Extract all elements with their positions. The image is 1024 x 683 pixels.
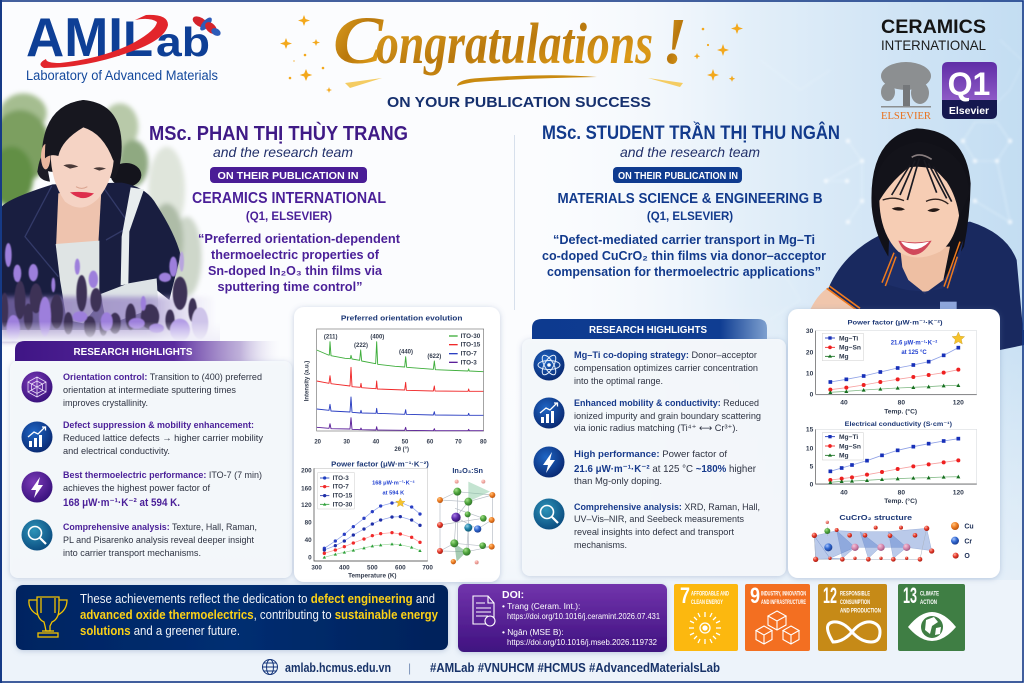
- icon: lightning: [534, 446, 564, 478]
- line chart: electrical conductivity: Mg−Sn: [839, 443, 861, 450]
- SDG tile 7: 7: [680, 583, 690, 608]
- icon: rising bars: [22, 422, 52, 452]
- SDG tile 9: 9: [750, 583, 760, 608]
- highlights header: [15, 341, 280, 361]
- logo wordmark: AMI: [26, 6, 123, 68]
- XRD chart: preferred orientation evolution: 80: [480, 439, 487, 445]
- hair: [871, 128, 971, 280]
- chart card: [788, 309, 1000, 578]
- icon: magnifier: [534, 498, 564, 530]
- line chart: power factor left: 600: [395, 565, 406, 572]
- title gold swooshes: [345, 75, 683, 88]
- trees behind the researcher: [0, 93, 202, 297]
- panel: charts right: [788, 309, 1000, 578]
- line chart: power factor left: 168 μW·m⁻¹·K⁻²: [372, 479, 415, 486]
- SDG tile 12: RESPONSIBLE: [840, 590, 870, 598]
- banner text: [80, 592, 438, 638]
- panel: research highlights right: [522, 319, 786, 576]
- XRD chart: preferred orientation evolution: Preferred orientation evolution: [341, 316, 462, 323]
- panel: achievements banner: [16, 585, 448, 650]
- line chart: power factor right: Mg: [839, 354, 849, 361]
- highlight text: high performance: High performance: Power factor of: [574, 449, 727, 459]
- line chart: electrical conductivity: Mg: [839, 453, 849, 460]
- highlights panel card: [522, 339, 786, 576]
- team line: and the research team: [620, 144, 760, 160]
- highlight text: defect suppression: Reduced lattice defects → higher carrier mobility: [63, 433, 263, 443]
- line chart: power factor left: [301, 461, 433, 580]
- title: Congratulations: ongratulations: [376, 11, 653, 76]
- logo red swoosh: [40, 15, 168, 68]
- banner text: solutions and a greener future.: [80, 624, 240, 638]
- Elsevier wordmark: ELSEVIER: [881, 111, 931, 122]
- XRD chart: preferred orientation evolution: 30: [343, 439, 351, 445]
- XRD chart: preferred orientation evolution: 2θ (°): [394, 447, 409, 453]
- lavender fade: [0, 322, 220, 342]
- highlights header: RESEARCH HIGHLIGHTS: [74, 346, 192, 358]
- icon: magnifier: [22, 520, 52, 550]
- author block: Phan Thi Thuy Trang: [149, 121, 408, 294]
- paper title quote: Sn-doped In₂O₃ thin films via: [208, 264, 383, 278]
- line chart: power factor right: Mg−Sn: [839, 345, 861, 352]
- neck and chest: [56, 185, 102, 247]
- highlight text: enhanced mobility: via ionic radius matching (Ti⁴⁺ ⟷ Cr³⁺).: [574, 423, 738, 433]
- line chart: power factor right: at 125 °C: [901, 350, 927, 356]
- SDG tile 9: [745, 583, 810, 651]
- navy polo shirt: [828, 222, 1024, 340]
- line chart: power factor right: 80: [898, 399, 905, 406]
- SDG tile 7: AFFORDABLE AND: [691, 590, 729, 598]
- highlight text: best thermoelectric performance: Best thermoelectric performance: ITO-7 (7 min): [63, 470, 262, 480]
- DOI text: DOI:: [502, 589, 524, 601]
- line chart: electrical conductivity: 15: [806, 427, 814, 434]
- XRD chart: preferred orientation evolution: (211): [324, 335, 337, 341]
- XRD chart: preferred orientation evolution: (440): [399, 350, 413, 356]
- icon: lightning: [22, 472, 52, 502]
- paper title quote: co-doped CuCrO₂ thin films via donor–acceptor: [542, 249, 826, 263]
- highlight text: comprehensive analysis: [574, 502, 760, 550]
- left edge border mask for photo: [0, 0, 2, 683]
- line chart: power factor right: 120: [953, 399, 964, 406]
- XRD chart: preferred orientation evolution: 20: [314, 439, 322, 445]
- banner text: advanced oxide thermoelectrics, contributing to sustainable energy: [80, 608, 438, 622]
- highlight text: comprehensive analysis: UV–Vis–NIR, and Seebeck measurements: [574, 514, 744, 524]
- chart card: [294, 307, 500, 582]
- journal: Ceramics International: [881, 17, 997, 122]
- line chart: power factor right: 21.6 μW·m⁻¹·K⁻²: [891, 340, 937, 347]
- SDG tile 9: INDUSTRY, INNOVATION: [761, 590, 806, 598]
- author block: Phan Thi Thuy Trang: (Q1, ELSEVIER): [246, 211, 332, 223]
- XRD chart: preferred orientation evolution: (622): [427, 354, 441, 360]
- line chart: power factor left: Power factor (μW·m⁻¹·K⁻²): [331, 461, 429, 468]
- highlight text: Mg-Ti co-doping: [574, 350, 758, 386]
- line chart: power factor left: 200: [301, 468, 312, 475]
- highlight text: best thermoelectric performance: achieves the highest power factor of: [63, 483, 210, 493]
- paper title quote: [198, 232, 401, 294]
- journal name: MATERIALS SCIENCE & ENGINEERING B: [558, 191, 822, 207]
- logo subtitle: Laboratory of Advanced Materials: [26, 68, 218, 83]
- paper title quote: “Preferred orientation-dependent: [198, 232, 401, 246]
- paper title quote: compensation for thermoelectric applications”: [547, 265, 821, 279]
- highlight text: orientation control: orientation at intermediate sputtering times: [63, 385, 236, 395]
- author name: MSc. PHAN THỊ THÙY TRANG: [149, 121, 408, 145]
- DOI text: • Ngân (MSE B):: [502, 627, 564, 637]
- arm and shoulder: [810, 287, 863, 310]
- decorative gold stars right: [694, 23, 743, 82]
- photo: researcher Tran Thi Thu Ngan: [810, 128, 1024, 340]
- crystal structure: CuCrO2: O: [964, 553, 970, 560]
- pill: ON THEIR PUBLICATION IN: [618, 171, 738, 182]
- journal name: CERAMICS INTERNATIONAL: [192, 190, 386, 207]
- line chart: electrical conductivity: Temp. (°C): [884, 497, 917, 505]
- XRD chart: preferred orientation evolution: Intensity (a.u.): [304, 361, 310, 401]
- highlight text: high performance: than Mg-only doping.: [574, 476, 662, 486]
- highlight text: defect suppression: Defect suppression & mobility enhancement:: [63, 420, 254, 430]
- SDG tile 13: [898, 583, 965, 651]
- highlight text: comprehensive analysis: into carrier transport mechanisms.: [63, 548, 201, 558]
- logo: AMI Lab: [26, 6, 222, 83]
- line chart: power factor left: 400: [339, 565, 350, 572]
- line chart: power factor left: 120: [301, 502, 312, 509]
- XRD chart: preferred orientation evolution: 40: [373, 439, 380, 445]
- hashtags: #AMLab #VNUHCM #HCMUS #AdvancedMaterialsLab: [430, 661, 720, 675]
- highlight text: defect suppression: [63, 420, 263, 456]
- icon: globe: [262, 660, 278, 674]
- line chart: electrical conductivity: 5: [810, 463, 814, 470]
- line chart: power factor left: Temperature (K): [348, 573, 397, 580]
- SDG tile 13: ACTION: [920, 599, 937, 606]
- author name: MSc. STUDENT TRẦN THỊ THU NGÂN: [542, 122, 840, 144]
- orange sleeve trim: [827, 286, 860, 310]
- face: [873, 142, 969, 257]
- line chart: electrical conductivity: 40: [840, 490, 848, 497]
- highlight text: best thermoelectric performance: 168 μW·m⁻¹·K⁻² at 594 K.: [63, 497, 180, 509]
- website: amlab.hcmus.edu.vn: [285, 661, 391, 675]
- paper title quote: sputtering time control”: [218, 280, 362, 294]
- hair: [37, 100, 141, 187]
- crystal structure: CuCrO2: Cr: [964, 538, 972, 545]
- line chart: electrical conductivity: 120: [953, 490, 964, 497]
- SDG tile 9: AND INFRASTRUCTURE: [761, 599, 806, 606]
- line chart: power factor right: 10: [806, 371, 814, 378]
- title: Congratulations: C: [333, 2, 384, 78]
- author block: Tran Thi Thu Ngan: (Q1, ELSEVIER): [647, 211, 733, 223]
- highlight text: comprehensive analysis: reveal insights into defect and transport: [574, 527, 734, 537]
- highlight text: Mg-Ti co-doping: into the optimal range.: [574, 376, 663, 386]
- SDG tile 7: CLEAN ENERGY: [691, 599, 724, 606]
- line chart: power factor left: ITO-3: [333, 475, 349, 482]
- icon: Elsevier tree: [881, 62, 931, 108]
- line chart: power factor left: 700: [422, 565, 433, 572]
- XRD chart: preferred orientation evolution: ITO-30: [461, 333, 481, 340]
- highlight text: orientation control: improves crystallinity.: [63, 398, 148, 408]
- crystal structure: CuCrO2: Cu: [964, 524, 974, 531]
- XRD chart: preferred orientation evolution: 50: [402, 439, 409, 445]
- journal: Ceramics International: INTERNATIONAL: [881, 37, 986, 53]
- line chart: power factor left: at 594 K: [382, 491, 405, 497]
- navy jacket: [2, 183, 181, 330]
- subtitle: ON YOUR PUBLICATION SUCCESS: [387, 94, 651, 111]
- panel: DOI: [458, 584, 667, 652]
- pill: ON THEIR PUBLICATION IN: [218, 170, 358, 182]
- footer: [262, 660, 720, 675]
- line chart: power factor right: 30: [806, 328, 814, 335]
- shirt logo: [940, 302, 957, 311]
- line chart: power factor left: ITO-7: [333, 484, 349, 491]
- XRD chart: preferred orientation evolution: ITO-3: [461, 359, 477, 366]
- SDG tile 12: CONSUMPTION: [840, 599, 870, 606]
- highlight text: defect suppression: and electrical conductivity.: [63, 446, 170, 456]
- crystal structure: CuCrO2: [812, 513, 974, 562]
- panel: charts left: [294, 307, 500, 582]
- highlight text: best thermoelectric performance: [63, 470, 262, 509]
- highlights panel card: [10, 361, 292, 578]
- XRD chart: preferred orientation evolution: (222): [354, 343, 368, 349]
- line chart: electrical conductivity: 0: [810, 481, 814, 488]
- highlight text: enhanced mobility: [574, 398, 761, 433]
- SDG tile 13: 13: [903, 583, 917, 608]
- DOI text: [502, 589, 660, 647]
- paper title quote: [542, 233, 826, 279]
- apron bib: [101, 278, 158, 325]
- line chart: power factor left: 500: [367, 565, 378, 572]
- jacket lapels: [25, 186, 131, 277]
- line chart: power factor left: 40: [305, 537, 312, 544]
- highlight text: comprehensive analysis: PL and Pisarenko analysis reveal deeper insight: [63, 535, 254, 545]
- line chart: electrical conductivity: Electrical conductivity (S·cm⁻¹): [845, 421, 952, 428]
- line chart: electrical conductivity: 10: [806, 445, 814, 452]
- neck: [900, 247, 950, 293]
- journal name: CERAMICS: [881, 17, 986, 38]
- XRD chart: preferred orientation evolution: (400): [370, 334, 384, 340]
- polo collar: [883, 240, 963, 293]
- icon: rising bars: [534, 398, 564, 428]
- line chart: power factor left: 0: [308, 555, 312, 562]
- icon: atom: [534, 350, 564, 380]
- highlight text: Mg-Ti co-doping: compensation optimizes carrier concentration: [574, 363, 758, 373]
- Q1 badge: Q1: [948, 66, 990, 102]
- line chart: power factor right: [806, 319, 977, 416]
- logo: AMI Lab: ab: [156, 19, 210, 65]
- XRD chart: preferred orientation evolution: ITO-7: [461, 351, 477, 358]
- SDG tile 7: [674, 583, 738, 651]
- line chart: power factor left: 300: [311, 565, 322, 572]
- background network pattern: [720, 40, 1024, 320]
- highlight text: comprehensive analysis: Comprehensive analysis: Texture, Hall, Raman,: [63, 522, 257, 532]
- line chart: power factor right: 20: [806, 349, 814, 356]
- highlight text: orientation control: Orientation control: Transition to (400) preferred: [63, 372, 262, 382]
- line chart: power factor left: ITO-30: [333, 501, 353, 508]
- decorative gold stars left: [280, 15, 332, 93]
- DOI text: https://doi.org/10.1016/j.ceramint.2026.07.431: [507, 611, 660, 621]
- line chart: power factor right: Temp. (°C): [884, 408, 917, 416]
- SDG tile 12: AND PRODUCTION: [840, 608, 881, 614]
- XRD chart: preferred orientation evolution: ITO-15: [461, 342, 481, 349]
- DOI text: https://doi.org/10.1016/j.mseb.2026.119732: [507, 637, 657, 647]
- logo L: L: [123, 11, 153, 67]
- icon: document: [473, 596, 495, 626]
- Q1 badge: [942, 62, 997, 119]
- vertical divider: [514, 135, 515, 310]
- line chart: power factor right: 0: [810, 392, 814, 399]
- highlight text: Mg-Ti co-doping: Mg–Ti co-doping strategy: Donor–acceptor: [574, 350, 757, 360]
- title: Congratulations: !: [662, 5, 687, 78]
- logo molecules: [191, 14, 222, 38]
- line chart: electrical conductivity: [806, 421, 977, 505]
- highlight text: enhanced mobility: Enhanced mobility & conductivity: Reduced: [574, 398, 759, 408]
- title: Congratulations: [333, 2, 687, 78]
- line chart: power factor right: Mg−Ti: [839, 335, 858, 342]
- crystal structure: In2O3:Sn: In₂O₃:Sn: [452, 466, 484, 475]
- line chart: electrical conductivity: 80: [898, 490, 905, 497]
- line chart: power factor right: 40: [840, 399, 848, 406]
- shirt continuation beside chart panel: [998, 330, 1024, 350]
- highlights header: [532, 319, 767, 339]
- highlight text: high performance: 21.6 μW·m⁻¹·K⁻² at 125 °C ~180% higher: [574, 463, 756, 475]
- white blouse: [56, 241, 99, 323]
- highlight text: comprehensive analysis: mechanisms.: [574, 540, 627, 550]
- crystal structure: In2O3:Sn: [437, 466, 495, 564]
- crystal structure: CuCrO2: CuCrO₂ structure: [839, 513, 912, 522]
- line chart: power factor left: 160: [301, 485, 312, 492]
- highlight text: comprehensive analysis: Comprehensive analysis: XRD, Raman, Hall,: [574, 502, 760, 512]
- pill: [613, 167, 742, 183]
- paper title quote: “Defect-mediated carrier transport in Mg–Ti: [553, 233, 815, 247]
- face: [41, 100, 121, 208]
- pill: [210, 167, 367, 183]
- apron strap: [121, 187, 144, 285]
- author block: Tran Thi Thu Ngan: [542, 122, 840, 279]
- icon: crystal: [22, 372, 52, 402]
- XRD chart: preferred orientation evolution: [304, 316, 487, 453]
- highlight text: orientation control: [63, 372, 262, 408]
- highlight text: enhanced mobility: ionized impurity and grain boundary scattering: [574, 411, 761, 421]
- SDG tile 13: CLIMATE: [920, 590, 939, 598]
- highlight text: comprehensive analysis: [63, 522, 257, 558]
- highlights header: RESEARCH HIGHLIGHTS: [589, 324, 707, 336]
- line chart: electrical conductivity: Mg−Ti: [839, 434, 858, 441]
- line chart: power factor left: 80: [305, 519, 312, 526]
- banner text: These achievements reflect the dedication to defect engineering and: [80, 592, 435, 606]
- highlight text: high performance: [574, 449, 756, 486]
- XRD chart: preferred orientation evolution: 70: [455, 439, 462, 445]
- DOI text: • Trang (Ceram. Int.):: [502, 601, 580, 611]
- team line: and the research team: [213, 144, 353, 160]
- line chart: power factor left: ITO-15: [333, 493, 353, 500]
- lavender field: [0, 243, 213, 342]
- footer: |: [408, 661, 411, 675]
- paper title quote: thermoelectric properties of: [211, 248, 380, 262]
- SDG tile 12: [818, 583, 887, 651]
- XRD chart: preferred orientation evolution: 60: [427, 439, 434, 445]
- photo: researcher Phan Thi Thuy Trang among lavender: [0, 93, 220, 342]
- Q1 badge: Elsevier: [949, 105, 989, 117]
- icon: trophy: [29, 597, 67, 637]
- panel: research highlights left: [10, 341, 292, 578]
- SDG tile 12: 12: [823, 583, 837, 608]
- line chart: power factor right: Power factor (μW·m⁻¹·K⁻²): [847, 319, 942, 326]
